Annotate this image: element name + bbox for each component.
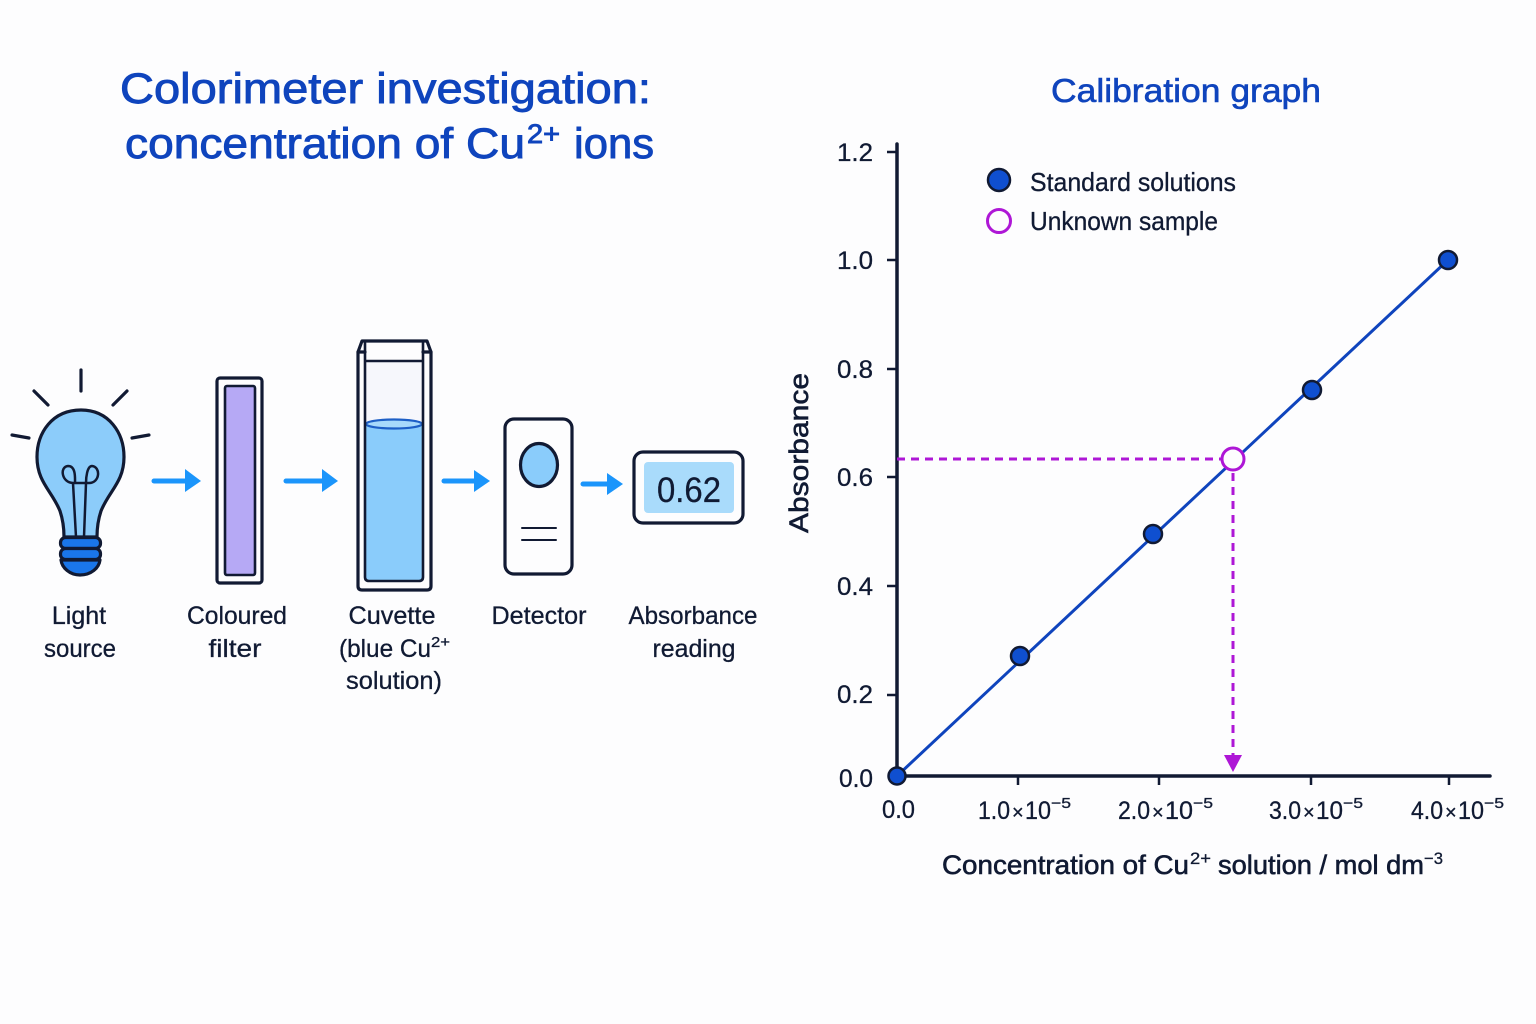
x axis tick labels: 0.0	[882, 796, 915, 824]
y axis tick labels: 1.2	[837, 139, 873, 167]
label: cuvette: solution)	[346, 667, 442, 695]
dashed guide lines	[897, 459, 1242, 772]
legend: Unknown sample	[1030, 206, 1218, 236]
icon: absorbance reading display	[634, 452, 743, 523]
y axis tick labels: 0.0	[839, 765, 873, 793]
y axis tick labels: 0.6	[837, 464, 873, 492]
y axis tick labels	[837, 139, 873, 793]
x axis title	[942, 849, 1443, 880]
x axis tick labels: 2.0	[1118, 797, 1150, 825]
label: absorbance reading: Absorbance	[628, 602, 758, 630]
icon: detector	[505, 419, 572, 574]
y axis tick labels: 0.4	[837, 573, 873, 601]
label: absorbance reading: reading	[652, 635, 736, 663]
label: light source	[44, 602, 116, 663]
label: cuvette	[339, 602, 450, 695]
icon: cuvette	[358, 341, 431, 590]
axes	[897, 144, 1490, 776]
x axis tick labels: −5	[1051, 795, 1071, 812]
x axis title: solution / mol dm	[1218, 850, 1424, 880]
x axis tick labels: 3.0	[1269, 797, 1301, 825]
label: light source: source	[44, 635, 116, 663]
legend	[988, 167, 1236, 236]
calibration line	[897, 260, 1448, 776]
title: ions	[574, 120, 654, 168]
standard solution points	[888, 251, 1457, 784]
title: concentration of Cu	[125, 120, 525, 168]
y axis title: Absorbance	[784, 373, 814, 533]
label: coloured filter	[187, 602, 287, 663]
x axis tick labels: −5	[1484, 795, 1504, 812]
x axis tick labels: 4.0	[1411, 797, 1443, 825]
legend: Standard solutions	[1030, 167, 1236, 197]
y axis tick labels: 0.2	[837, 681, 873, 709]
label: absorbance reading	[628, 602, 758, 663]
x axis tick labels: ×	[1012, 802, 1024, 824]
heading: calibration graph: Calibration graph	[1051, 72, 1321, 109]
x axis tick labels: 1.0	[978, 797, 1010, 825]
title: Colorimeter investigation:	[120, 65, 651, 113]
x axis tick labels: 10	[1316, 797, 1343, 825]
x axis tick labels: 10	[1025, 797, 1051, 825]
y axis tick labels: 1.0	[837, 247, 873, 275]
label: coloured filter: filter	[208, 635, 262, 663]
x axis tick labels: 10	[1165, 797, 1193, 825]
x axis title: −3	[1424, 849, 1443, 868]
label: detector: Detector	[492, 602, 586, 630]
arrow: bulb to filter	[154, 469, 201, 492]
chart: calibration graph	[784, 139, 1504, 880]
x axis tick labels	[882, 795, 1504, 825]
unknown sample point	[1222, 448, 1244, 470]
reading value: 0.62	[657, 471, 721, 510]
title: 2+	[527, 119, 560, 149]
label: cuvette: (blue Cu	[339, 635, 431, 663]
label: light source: Light	[52, 602, 106, 630]
title	[120, 65, 654, 168]
x axis tick labels: ×	[1303, 802, 1315, 824]
x axis tick labels: ×	[1445, 802, 1457, 824]
label: cuvette: 2+	[431, 634, 450, 651]
arrow: detector to reading	[583, 473, 623, 495]
x axis tick labels: ×	[1152, 802, 1164, 824]
icon: light bulb	[12, 370, 149, 575]
icon: coloured filter	[217, 378, 262, 583]
arrow: cuvette to detector	[444, 470, 490, 492]
x axis tick labels: −5	[1193, 795, 1213, 812]
x axis title: Concentration of Cu	[942, 850, 1189, 880]
x axis tick labels: −5	[1343, 795, 1363, 812]
arrow: filter to cuvette	[286, 469, 338, 492]
label: cuvette: Cuvette	[348, 602, 436, 630]
label: coloured filter: Coloured	[187, 602, 287, 630]
x axis tick labels: 10	[1458, 797, 1484, 825]
y axis tick labels: 0.8	[837, 356, 873, 384]
x axis title: 2+	[1190, 849, 1211, 868]
